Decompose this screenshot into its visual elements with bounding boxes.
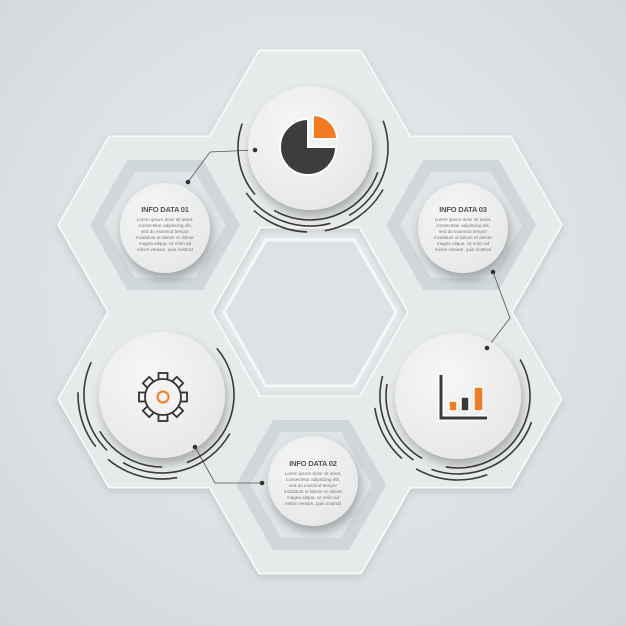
inner hex bands bbox=[90, 160, 536, 550]
arcs: bottom-left circle bbox=[55, 288, 269, 502]
icon: gear bbox=[139, 373, 187, 421]
circle: pie chart bbox=[248, 86, 372, 210]
connector dots bbox=[186, 148, 495, 485]
info circle 02 bbox=[268, 436, 358, 526]
info circle 02: incididunt ut labore et dolore bbox=[284, 489, 342, 494]
hexagon ring background bbox=[60, 52, 560, 572]
central hexagon hole bbox=[224, 240, 396, 386]
info circle 02: INFO DATA 02 bbox=[289, 459, 337, 468]
info circle 03: Lorem ipsum dolor sit amet, bbox=[435, 217, 491, 222]
info circle 03: INFO DATA 03 bbox=[439, 205, 487, 214]
icon: pie chart bbox=[280, 115, 337, 175]
info circle 03: minim veniam, quis nostrud bbox=[435, 247, 491, 252]
connector lines bbox=[188, 150, 510, 483]
info circle 03: sed do eiusmod tempor bbox=[439, 229, 487, 234]
info circle 01: incididunt ut labore et dolore bbox=[136, 235, 194, 240]
info circle 01: sed do eiusmod tempor bbox=[141, 229, 189, 234]
info circle 01 bbox=[120, 183, 210, 273]
info circle 01: INFO DATA 01 bbox=[141, 205, 189, 214]
info circle 02: consectetur adipiscing elit, bbox=[286, 477, 340, 482]
info circle 03 bbox=[418, 183, 508, 273]
info circle 03: incididunt ut labore et dolore bbox=[434, 235, 492, 240]
circle: gear bbox=[99, 332, 225, 458]
arcs: bottom-right circle bbox=[350, 288, 566, 504]
info circle 02: magna aliqua. Ut enim ad bbox=[287, 495, 340, 500]
info circle 01: consectetur adipiscing elit, bbox=[138, 223, 192, 228]
arcs: top circle bbox=[195, 33, 425, 263]
icon: bar chart bbox=[441, 375, 487, 418]
circle: bar chart bbox=[395, 333, 521, 459]
info circle 02: Lorem ipsum dolor sit amet, bbox=[285, 471, 341, 476]
info circle 02: minim veniam, quis nostrud bbox=[285, 501, 341, 506]
info circle 03: magna aliqua. Ut enim ad bbox=[437, 241, 490, 246]
info circle 03: consectetur adipiscing elit, bbox=[436, 223, 490, 228]
info circle 02: sed do eiusmod tempor bbox=[289, 483, 337, 488]
info circle 01: Lorem ipsum dolor sit amet, bbox=[137, 217, 193, 222]
info circle 01: magna aliqua. Ut enim ad bbox=[139, 241, 192, 246]
info circle 01: minim veniam, quis nostrud bbox=[137, 247, 193, 252]
